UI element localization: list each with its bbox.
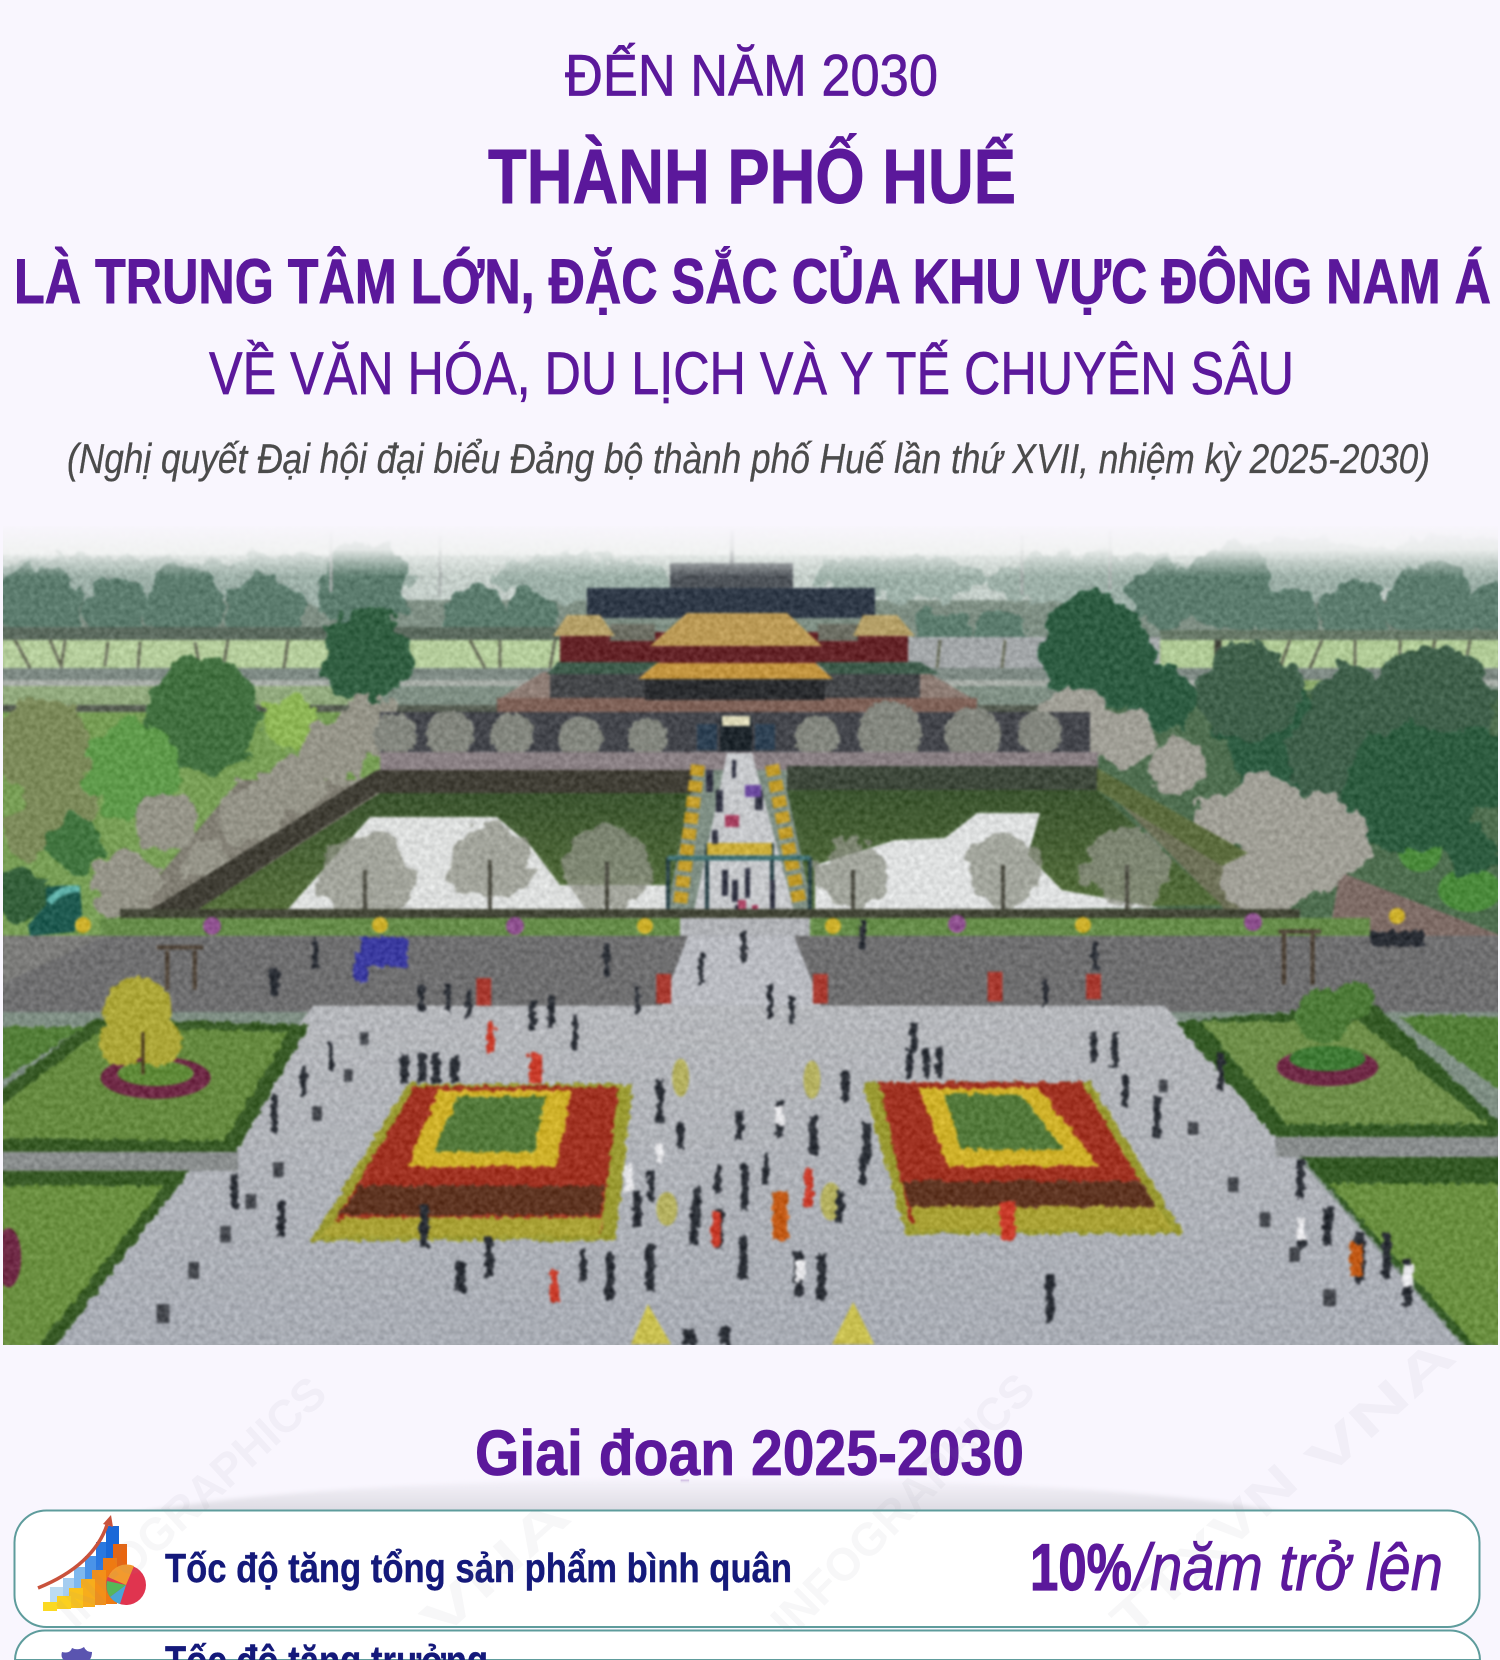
causeway flowers	[680, 765, 698, 905]
pond walls	[150, 770, 692, 910]
right pond water	[787, 790, 1222, 910]
plaza	[51, 1006, 1463, 1347]
dark pavement	[0, 936, 1500, 1012]
card frame	[14, 1510, 1480, 1627]
central door	[720, 717, 752, 751]
tree trunks on lawn	[15, 640, 1470, 668]
title block	[14, 44, 1491, 482]
people	[231, 919, 1424, 1344]
watermarks: TTXVN	[1100, 1453, 1308, 1648]
sky haze fade	[0, 522, 1500, 577]
lower section of photo	[0, 919, 1500, 1347]
lamp posts	[328, 551, 1024, 596]
right lawn road and hedges	[1332, 874, 1498, 937]
gate terrace	[503, 672, 968, 698]
heading line: culture, tourism, medicine: VỀ VĂN HÓA, DU LỊCH VÀ Y TẾ CHUYÊN SÂU	[209, 340, 1294, 407]
gate green roofs	[547, 662, 660, 674]
shadow arc above cards	[124, 1478, 1301, 1516]
flowerbed right	[863, 1082, 1183, 1234]
panel: indicator card 1	[14, 1510, 1480, 1627]
people on causeway	[706, 760, 775, 944]
right tree mass	[1041, 596, 1500, 876]
bottom trees	[631, 1302, 874, 1344]
lawns	[0, 1006, 1500, 1347]
watermarks: INFOGRAPHICS	[760, 1363, 1045, 1647]
bare trees on pond	[319, 822, 1169, 924]
ground left and right of pond	[0, 712, 400, 940]
gate lower roof	[638, 663, 833, 679]
gate wings dark hall	[550, 672, 645, 698]
gate side roofs	[553, 615, 615, 636]
card frame and hand icon	[14, 1630, 1481, 1660]
central path	[662, 936, 821, 1006]
left trees	[0, 611, 411, 923]
rickshaw	[28, 885, 82, 936]
photo: Hue imperial citadel aerial view	[0, 520, 1500, 1350]
hazy treeline	[3, 540, 1498, 638]
flowerbed left	[311, 1084, 633, 1241]
icon: bar chart with arrow and pie	[38, 1515, 146, 1611]
left pond water	[197, 793, 690, 910]
flower rings and small trees	[101, 1056, 211, 1099]
pavilions	[157, 932, 1321, 990]
gate main roof	[650, 613, 822, 646]
ceremonial arch	[668, 843, 810, 925]
gate red wall	[560, 632, 908, 664]
causeway	[694, 752, 794, 910]
panel: indicator card 2	[14, 1630, 1481, 1660]
watermarks: VNA	[1295, 1326, 1466, 1488]
watermarks	[47, 1326, 1466, 1648]
stone lions	[157, 1032, 1336, 1323]
watermarks: VNA	[410, 1486, 581, 1648]
section heading: period 2025-2030: Giai đoạn 2025-2030	[475, 1417, 1024, 1489]
blossom trees right	[1035, 687, 1368, 920]
indicator value: per year or more: /năm trở lên	[1130, 1530, 1443, 1604]
wall below gate and trees	[380, 712, 1090, 754]
courtyard behind pond	[380, 752, 1098, 770]
heading line: Hue city: THÀNH PHỐ HUẾ	[488, 133, 1016, 220]
indicator label: Tốc độ tăng tổng sản phẩm bình quân	[165, 1545, 792, 1591]
heading line: by 2030: ĐẾN NĂM 2030	[565, 44, 938, 108]
flower pots on strip	[75, 908, 1405, 934]
red pots	[476, 972, 1101, 1006]
watermarks: INFOGRAPHICS	[47, 1366, 336, 1637]
potted plants on plaza	[656, 1059, 842, 1226]
distant hall	[670, 563, 793, 589]
lower pond wall and grass strip	[120, 909, 1300, 918]
lawn band	[0, 640, 560, 669]
indicator value: percent: 10%	[1030, 1530, 1132, 1604]
